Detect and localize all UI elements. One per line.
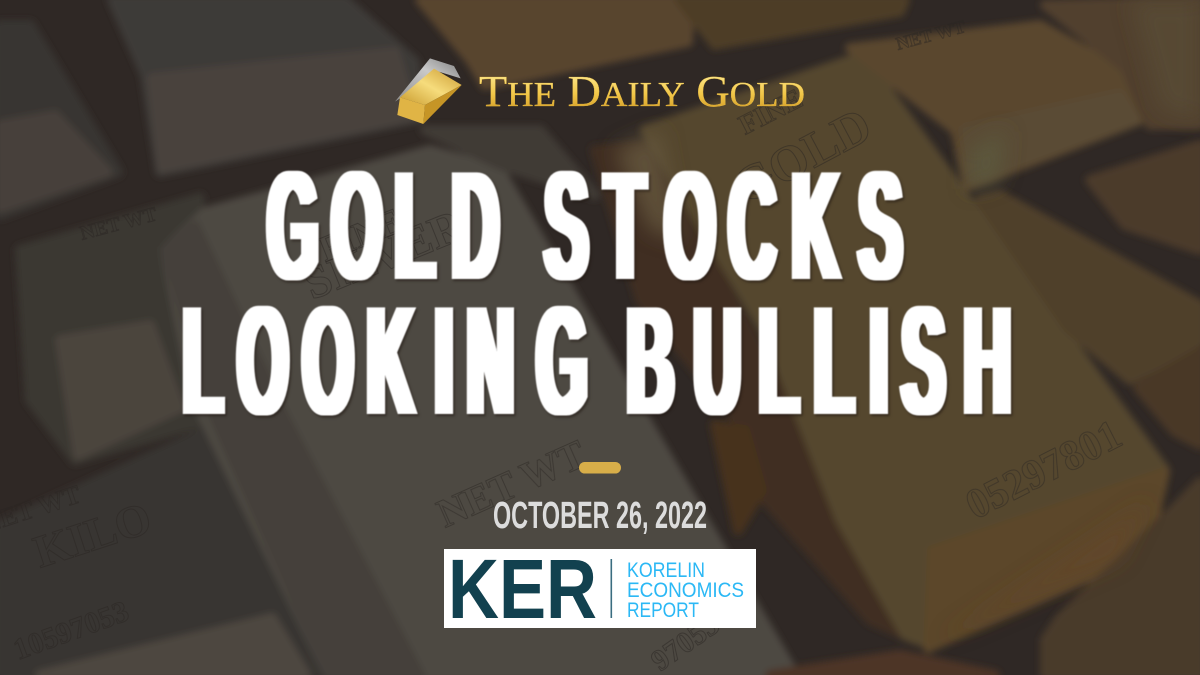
bar: right mid gold	[980, 195, 1200, 380]
report name: KORELIN	[627, 559, 705, 582]
title line 1: GOLD STOCKS	[268, 139, 902, 313]
icon: gold and silver bars	[395, 58, 462, 124]
bar: top gold one	[420, 0, 690, 85]
embossed stamps: KILO	[27, 492, 157, 578]
KER letters: KER	[448, 542, 597, 636]
title line 2: LOOKING BULLISH	[183, 274, 1011, 448]
bar: bottom right gold	[1045, 482, 1200, 675]
embossed stamps: FINE	[313, 200, 408, 269]
bar: top right gold	[1045, 0, 1200, 125]
divider pill	[579, 462, 621, 474]
date: OCTOBER 26, 2022	[493, 495, 707, 537]
embossed stamps: 10597053	[9, 595, 133, 667]
bar: top left silver	[112, 0, 420, 172]
bar: bottom left silver	[0, 430, 320, 675]
logo wordmark: THE DAILY GOLD	[479, 67, 805, 116]
embossed stamps: NET WT	[78, 203, 160, 245]
soft highlights	[615, 0, 1200, 640]
bar: big gold	[645, 60, 1165, 645]
report name	[627, 559, 744, 622]
logo: The Daily Gold	[395, 58, 805, 124]
embossed stamps: 05297801	[959, 412, 1129, 529]
bar: central silver	[165, 150, 795, 675]
embossed stamps: FINE	[734, 83, 808, 141]
logo: Korelin Economics Report	[444, 542, 756, 636]
bar: big gold shaded side	[595, 145, 915, 640]
report name: REPORT	[627, 599, 699, 622]
embossed stamps: NET WT	[430, 431, 593, 536]
embossed stamps: NET WT	[894, 16, 967, 54]
embossed stamps: SILVER	[297, 199, 471, 309]
report name: ECONOMICS	[627, 579, 744, 602]
bar: right upper gold	[850, 25, 1140, 186]
bar: small silver behind	[425, 130, 595, 195]
reflection beside central bar	[715, 425, 762, 530]
bar: left mid silver	[20, 198, 210, 460]
title	[183, 139, 1011, 448]
bar: far left silver	[0, 25, 118, 215]
embossed stamps: GOLD	[724, 96, 880, 215]
